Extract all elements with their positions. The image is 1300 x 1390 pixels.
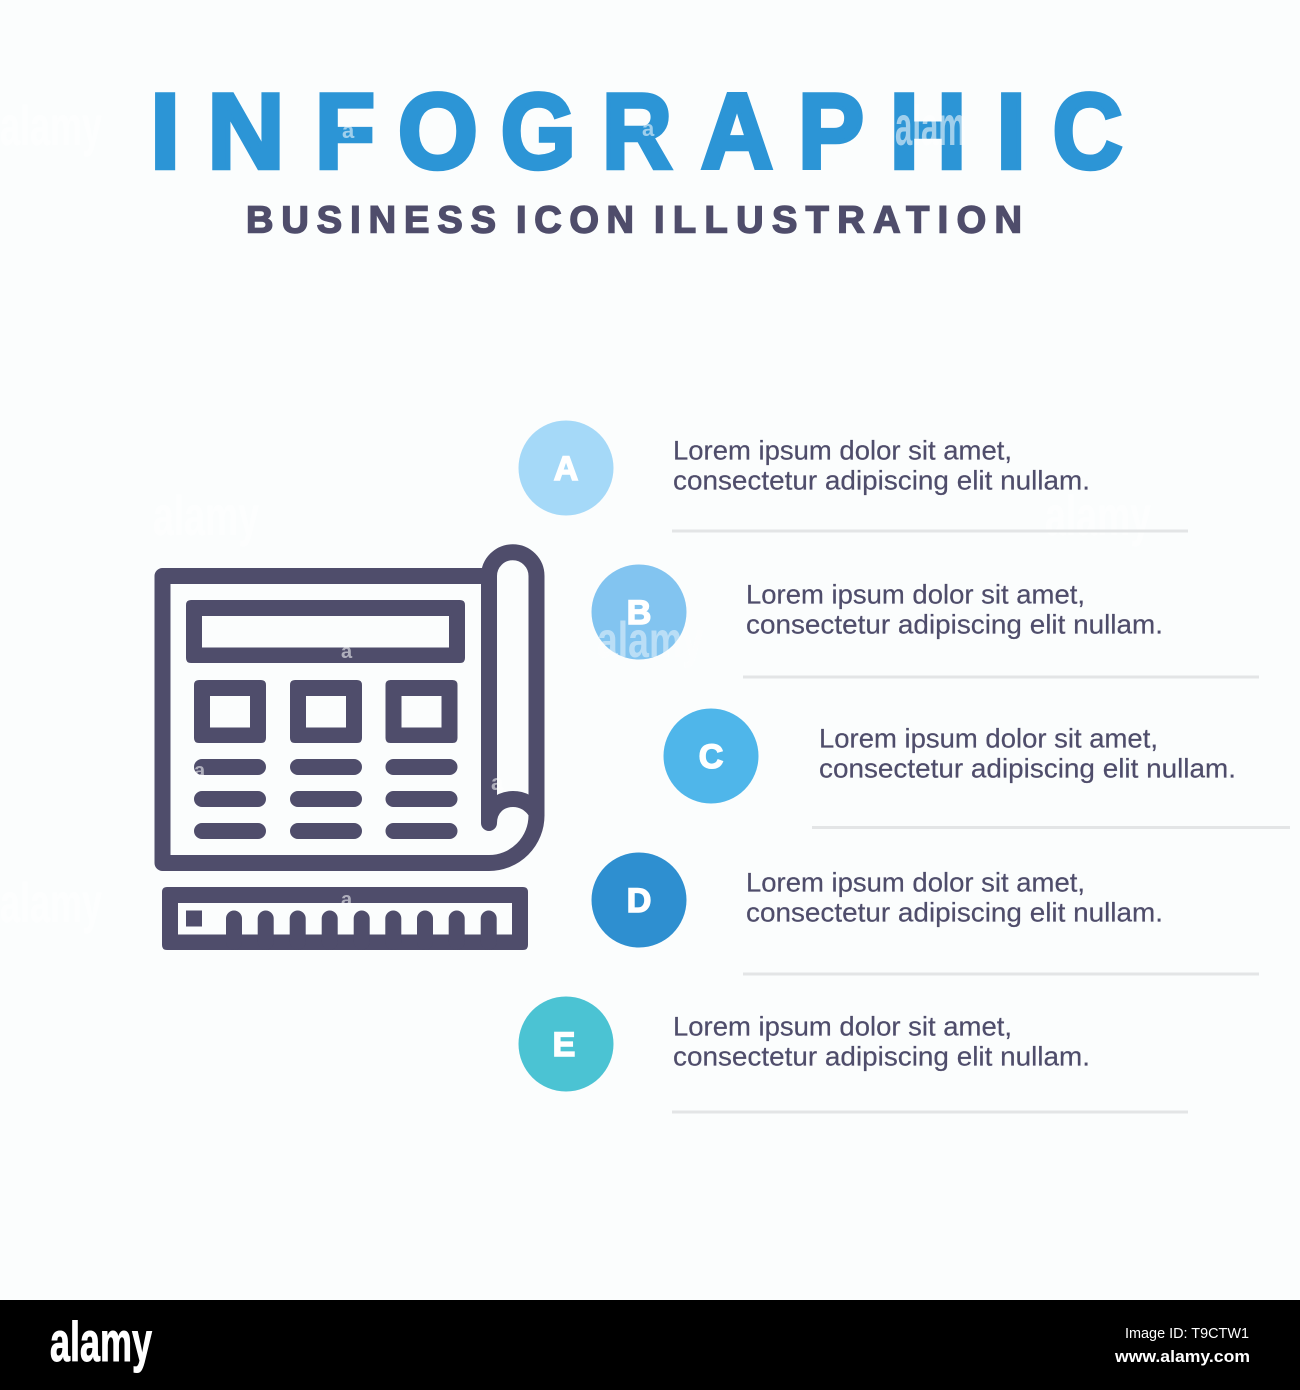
- badge B: alamy: [597, 612, 703, 668]
- text C: [819, 724, 1236, 784]
- faint background watermarks: alamy: [153, 484, 259, 547]
- text A: [673, 436, 1090, 496]
- text B: [746, 580, 1163, 640]
- icon part: ruler: [162, 887, 528, 950]
- badge B: B: [627, 594, 651, 632]
- badge D: [592, 852, 686, 948]
- subtitle: ICON: [516, 200, 634, 242]
- title: C: [1053, 71, 1123, 191]
- text C: Lorem ipsum dolor sit amet,: [819, 724, 1158, 754]
- badge A: [518, 420, 614, 516]
- title: N: [207, 71, 285, 191]
- badge C: C: [699, 738, 723, 776]
- subtitle: BUSINESS: [246, 200, 496, 242]
- title: I: [150, 71, 180, 191]
- icon part: text lines: [202, 767, 450, 831]
- faint background watermarks: alamy: [0, 871, 102, 934]
- icon part: header box: [186, 600, 465, 663]
- footer image id: Image ID: T9CTW1: [1125, 1325, 1249, 1342]
- step B: [592, 564, 1259, 678]
- badge A: A: [554, 450, 578, 488]
- watermark overlays on title and icon: a: [491, 770, 504, 795]
- badge D: D: [627, 882, 651, 920]
- watermark overlays on title and icon: alam: [895, 94, 966, 157]
- text C: consectetur adipiscing elit nullam.: [819, 754, 1236, 784]
- text E: [673, 1012, 1090, 1072]
- text D: Lorem ipsum dolor sit amet,: [746, 868, 1085, 898]
- title: R: [602, 71, 672, 191]
- text D: [746, 868, 1163, 928]
- title: G: [501, 71, 576, 191]
- footer website: www.alamy.com: [1114, 1347, 1250, 1366]
- step A: [518, 420, 1188, 532]
- title: F: [315, 71, 375, 191]
- text B: consectetur adipiscing elit nullam.: [746, 610, 1163, 640]
- icon part: sheet outline with roll: [162, 552, 536, 863]
- icon part: three image boxes: [194, 680, 458, 743]
- watermark overlays on title and icon: a: [341, 889, 353, 911]
- title: [150, 71, 1123, 191]
- text A: Lorem ipsum dolor sit amet,: [673, 436, 1012, 466]
- badge E: [518, 996, 614, 1092]
- faint background watermarks: [0, 94, 1151, 934]
- badge E: E: [553, 1026, 575, 1064]
- watermark overlays on title and icon: a: [642, 116, 655, 141]
- title: I: [996, 71, 1026, 191]
- faint background watermarks: alamy: [0, 94, 102, 157]
- text E: consectetur adipiscing elit nullam.: [673, 1042, 1090, 1072]
- text A: consectetur adipiscing elit nullam.: [673, 466, 1090, 496]
- subtitle: ILLUSTRATION: [654, 200, 1022, 242]
- watermark overlays on title and icon: a: [194, 760, 206, 782]
- badge B: [592, 564, 703, 668]
- text B: Lorem ipsum dolor sit amet,: [746, 580, 1085, 610]
- step D: [592, 852, 1259, 976]
- icon: blueprint sheet and ruler: [162, 552, 536, 950]
- title: H: [889, 71, 967, 191]
- title: O: [398, 71, 478, 191]
- title: A: [701, 71, 773, 191]
- watermark overlays on title and icon: a: [341, 641, 353, 663]
- title: P: [798, 71, 864, 191]
- text D: consectetur adipiscing elit nullam.: [746, 898, 1163, 928]
- subtitle: [246, 200, 1022, 242]
- badge C: [664, 708, 758, 804]
- step C: [664, 708, 1290, 829]
- footer bar: [0, 1300, 1300, 1390]
- footer logo: alamy: [50, 1310, 152, 1373]
- text E: Lorem ipsum dolor sit amet,: [673, 1012, 1012, 1042]
- step E: [518, 996, 1188, 1114]
- watermark overlays on title and icon: [194, 94, 966, 911]
- watermark overlays on title and icon: a: [342, 118, 355, 143]
- faint background watermarks: alamy: [1045, 484, 1151, 547]
